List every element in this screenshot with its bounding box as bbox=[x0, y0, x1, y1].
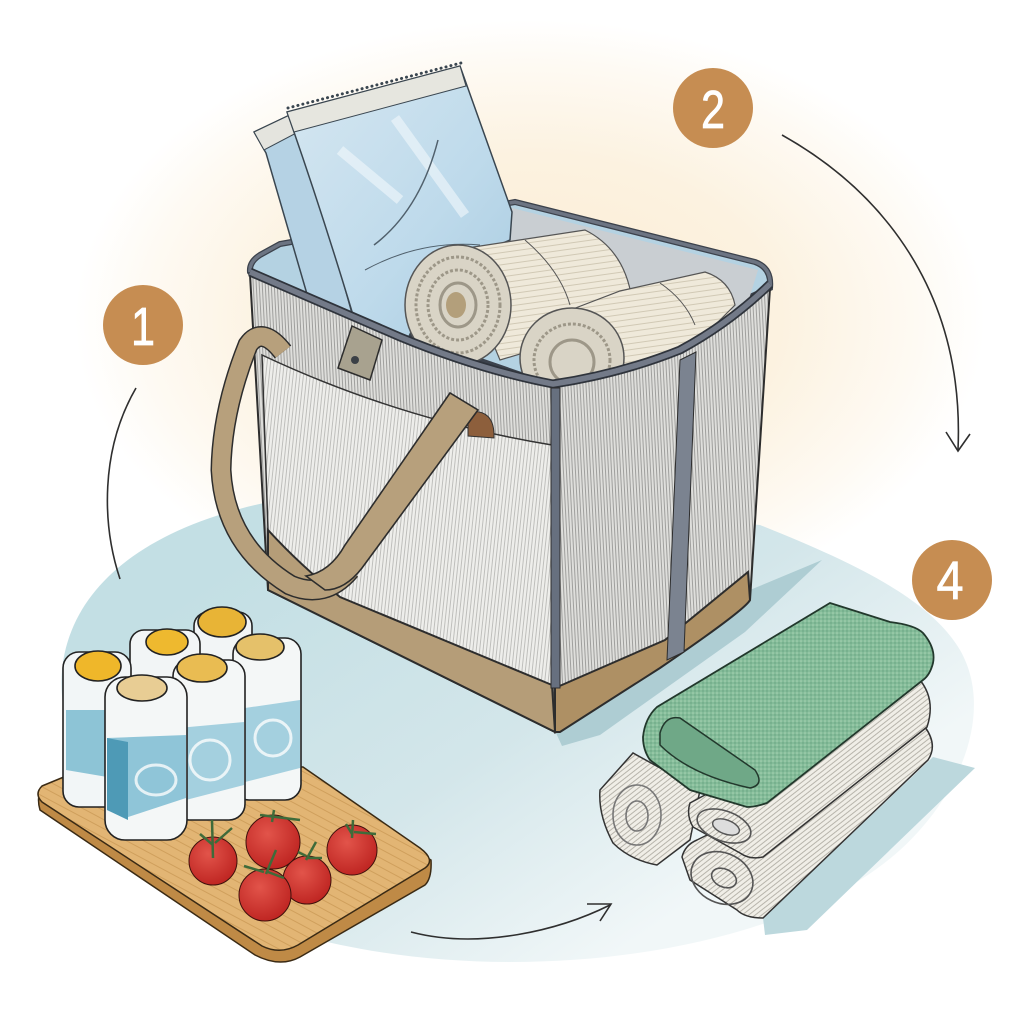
metal buckle bbox=[338, 326, 382, 380]
badge 2 bbox=[673, 68, 753, 148]
corner seam bbox=[551, 388, 560, 688]
tomatoes bbox=[189, 810, 377, 921]
leather tab bbox=[468, 412, 494, 438]
back towel roll bbox=[405, 230, 632, 365]
cutting board bbox=[38, 762, 431, 962]
badge 1: 1 bbox=[131, 298, 155, 357]
front towel roll bbox=[520, 272, 735, 408]
bag side panel bbox=[553, 288, 770, 732]
vertical strap bbox=[667, 352, 696, 660]
arrow: step 1 to floor bbox=[107, 388, 136, 579]
front pocket bbox=[262, 355, 552, 688]
back rim band bbox=[250, 202, 770, 288]
floor ellipse bbox=[62, 500, 974, 962]
badge 4 bbox=[912, 540, 992, 620]
badge 4: 4 bbox=[936, 550, 964, 611]
arrow: cutting board to towels bbox=[411, 904, 611, 939]
can left bbox=[63, 651, 131, 807]
ice pack front bbox=[287, 63, 512, 345]
can right bbox=[233, 634, 301, 800]
insulated tote bag bbox=[221, 63, 770, 732]
can center bbox=[173, 654, 245, 820]
can back middle bbox=[130, 629, 200, 720]
arrow: step 2 to step 4 bbox=[782, 135, 970, 451]
foil lining bbox=[505, 208, 758, 312]
towel stack bbox=[600, 603, 934, 918]
tote handle bbox=[221, 336, 478, 590]
green towel bbox=[643, 603, 934, 807]
green towel fold bbox=[660, 718, 759, 788]
bag front panel bbox=[250, 275, 555, 732]
can back right bbox=[194, 607, 252, 702]
ice pack back bbox=[254, 112, 360, 342]
bag base side bbox=[555, 572, 750, 732]
middle towel bbox=[689, 680, 930, 858]
left rolled towel bbox=[600, 753, 700, 865]
bottom towel bbox=[682, 727, 932, 918]
bag interior and rim bbox=[250, 202, 770, 386]
badge 1 bbox=[103, 285, 183, 365]
bag base front bbox=[268, 530, 555, 732]
badge 2: 2 bbox=[701, 81, 725, 140]
can front bbox=[105, 675, 187, 840]
background glow bbox=[75, 20, 985, 620]
cans bbox=[63, 607, 301, 840]
bag shadow bbox=[556, 560, 822, 746]
towel shadow bbox=[763, 757, 975, 935]
front rim band bbox=[250, 272, 770, 384]
